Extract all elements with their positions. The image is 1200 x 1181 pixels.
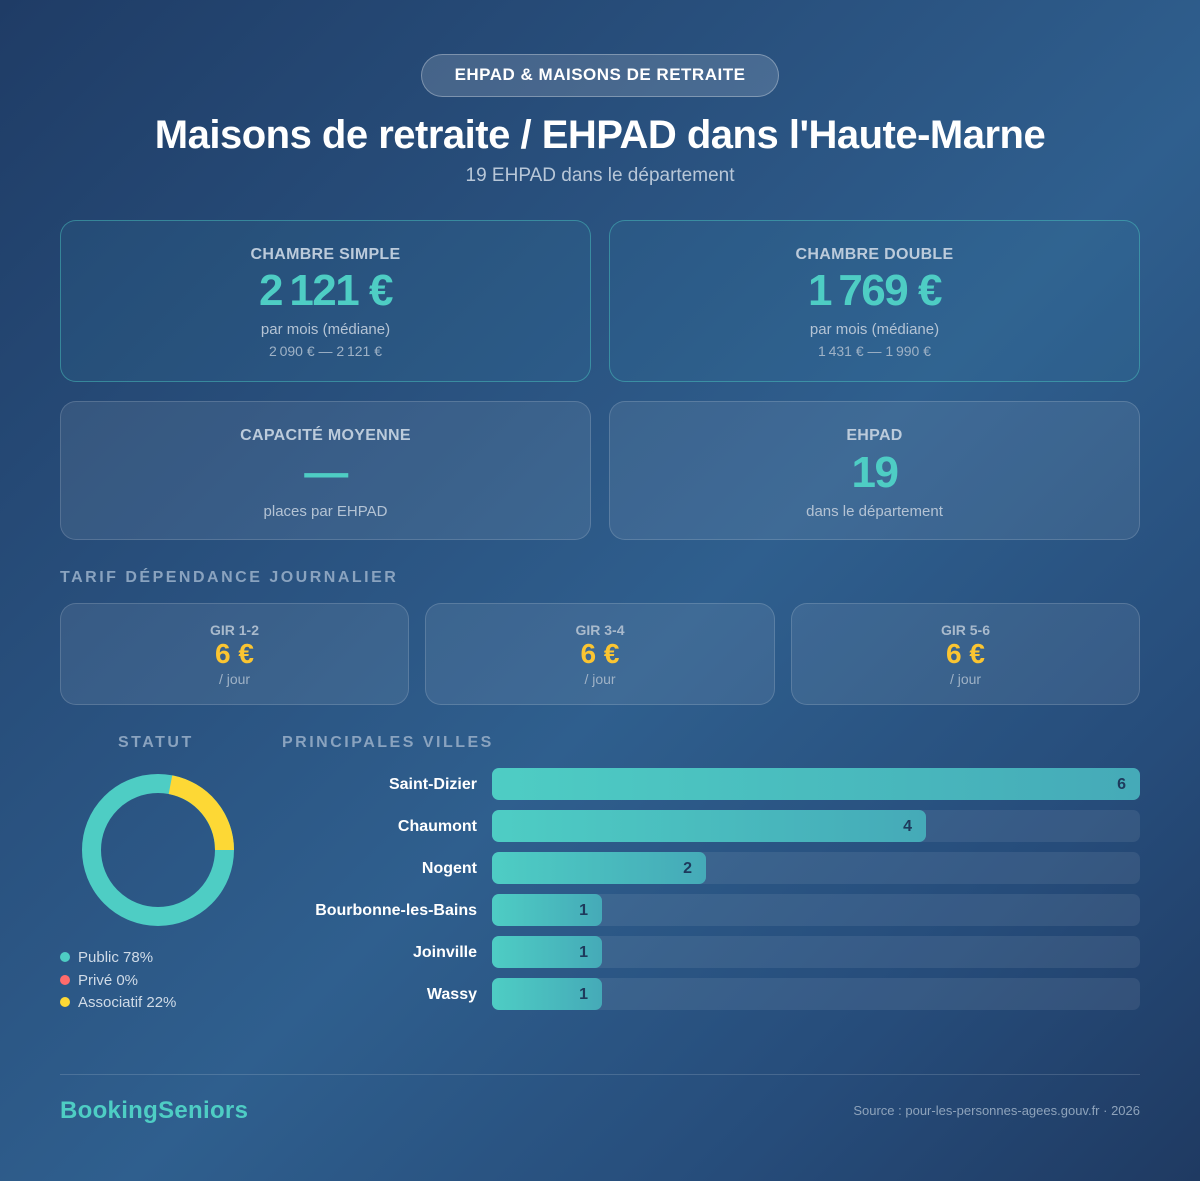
card: GIR 5-6 bbox=[791, 603, 1140, 705]
card: GIR 1-2 bbox=[60, 603, 409, 705]
bar chart: 4 bbox=[903, 818, 912, 835]
card: chambre double: CHAMBRE DOUBLE bbox=[796, 246, 953, 263]
source: Source : pour-les-personnes-agees.gouv.fr · 2026 bbox=[853, 1103, 1140, 1118]
card: chambre double: par mois (médiane) bbox=[810, 321, 939, 338]
card: GIR 1-2: 6 € bbox=[215, 638, 254, 669]
legend: Associatif 22% bbox=[78, 994, 176, 1011]
donut chart bbox=[82, 774, 234, 926]
section heading: tarif: TARIF DÉPENDANCE JOURNALIER bbox=[60, 569, 398, 586]
bar chart: 1 bbox=[579, 944, 588, 961]
card: ehpad count: EHPAD bbox=[846, 427, 903, 444]
card: chambre simple: 2 121 € bbox=[259, 266, 392, 315]
subtitle: 19 EHPAD dans le département bbox=[466, 165, 734, 186]
card: capacité moyenne: places par EHPAD bbox=[264, 503, 387, 520]
title: Maisons de retraite / EHPAD dans l'Haute-Marne bbox=[155, 113, 1045, 157]
brand logo: BookingSeniors bbox=[60, 1097, 248, 1124]
legend: Privé 0% bbox=[78, 972, 138, 988]
card: chambre double bbox=[609, 220, 1140, 382]
card: chambre simple: 2 090 € — 2 121 € bbox=[269, 343, 382, 359]
bar chart: Nogent bbox=[422, 860, 477, 877]
card: chambre simple: CHAMBRE SIMPLE bbox=[250, 246, 400, 263]
bar chart: Bourbonne-les-Bains bbox=[315, 902, 477, 919]
bar chart bbox=[315, 768, 1140, 1010]
bar chart: 1 bbox=[579, 986, 588, 1003]
card: ehpad count: 19 bbox=[852, 448, 897, 497]
bar chart: Wassy bbox=[427, 986, 477, 1003]
card: GIR 3-4 bbox=[425, 603, 775, 705]
card: GIR 5-6: / jour bbox=[950, 671, 981, 687]
badge: EHPAD & MAISONS DE RETRAITE bbox=[455, 65, 745, 84]
bar chart: Joinville bbox=[413, 944, 477, 961]
bar chart: 2 bbox=[683, 860, 692, 877]
card: capacité moyenne: CAPACITÉ MOYENNE bbox=[240, 427, 411, 444]
legend bbox=[60, 949, 176, 1011]
card: ehpad count: dans le département bbox=[806, 503, 943, 520]
card: chambre double: 1 769 € bbox=[808, 266, 941, 315]
bar chart: 6 bbox=[1117, 776, 1126, 793]
legend: Public 78% bbox=[78, 949, 153, 966]
card: chambre double: 1 431 € — 1 990 € bbox=[818, 343, 931, 359]
card: GIR 5-6: GIR 5-6 bbox=[941, 622, 990, 638]
bar chart: Saint-Dizier bbox=[389, 776, 477, 793]
card: GIR 3-4: 6 € bbox=[581, 638, 619, 669]
bar chart: 1 bbox=[579, 902, 588, 919]
card: ehpad count bbox=[609, 401, 1140, 540]
card: GIR 5-6: 6 € bbox=[946, 638, 985, 669]
card: capacité moyenne: — bbox=[304, 448, 347, 497]
badge bbox=[421, 54, 779, 97]
section heading: statut: STATUT bbox=[118, 734, 194, 751]
card: GIR 1-2: GIR 1-2 bbox=[210, 622, 259, 638]
card: capacité moyenne bbox=[60, 401, 591, 540]
card: chambre simple: par mois (médiane) bbox=[261, 321, 390, 338]
card: chambre simple bbox=[60, 220, 591, 382]
card: GIR 1-2: / jour bbox=[219, 671, 250, 687]
card: GIR 3-4: / jour bbox=[584, 671, 616, 687]
section heading: villes: PRINCIPALES VILLES bbox=[282, 734, 494, 751]
bar chart: Chaumont bbox=[398, 818, 477, 835]
card: GIR 3-4: GIR 3-4 bbox=[575, 622, 624, 638]
